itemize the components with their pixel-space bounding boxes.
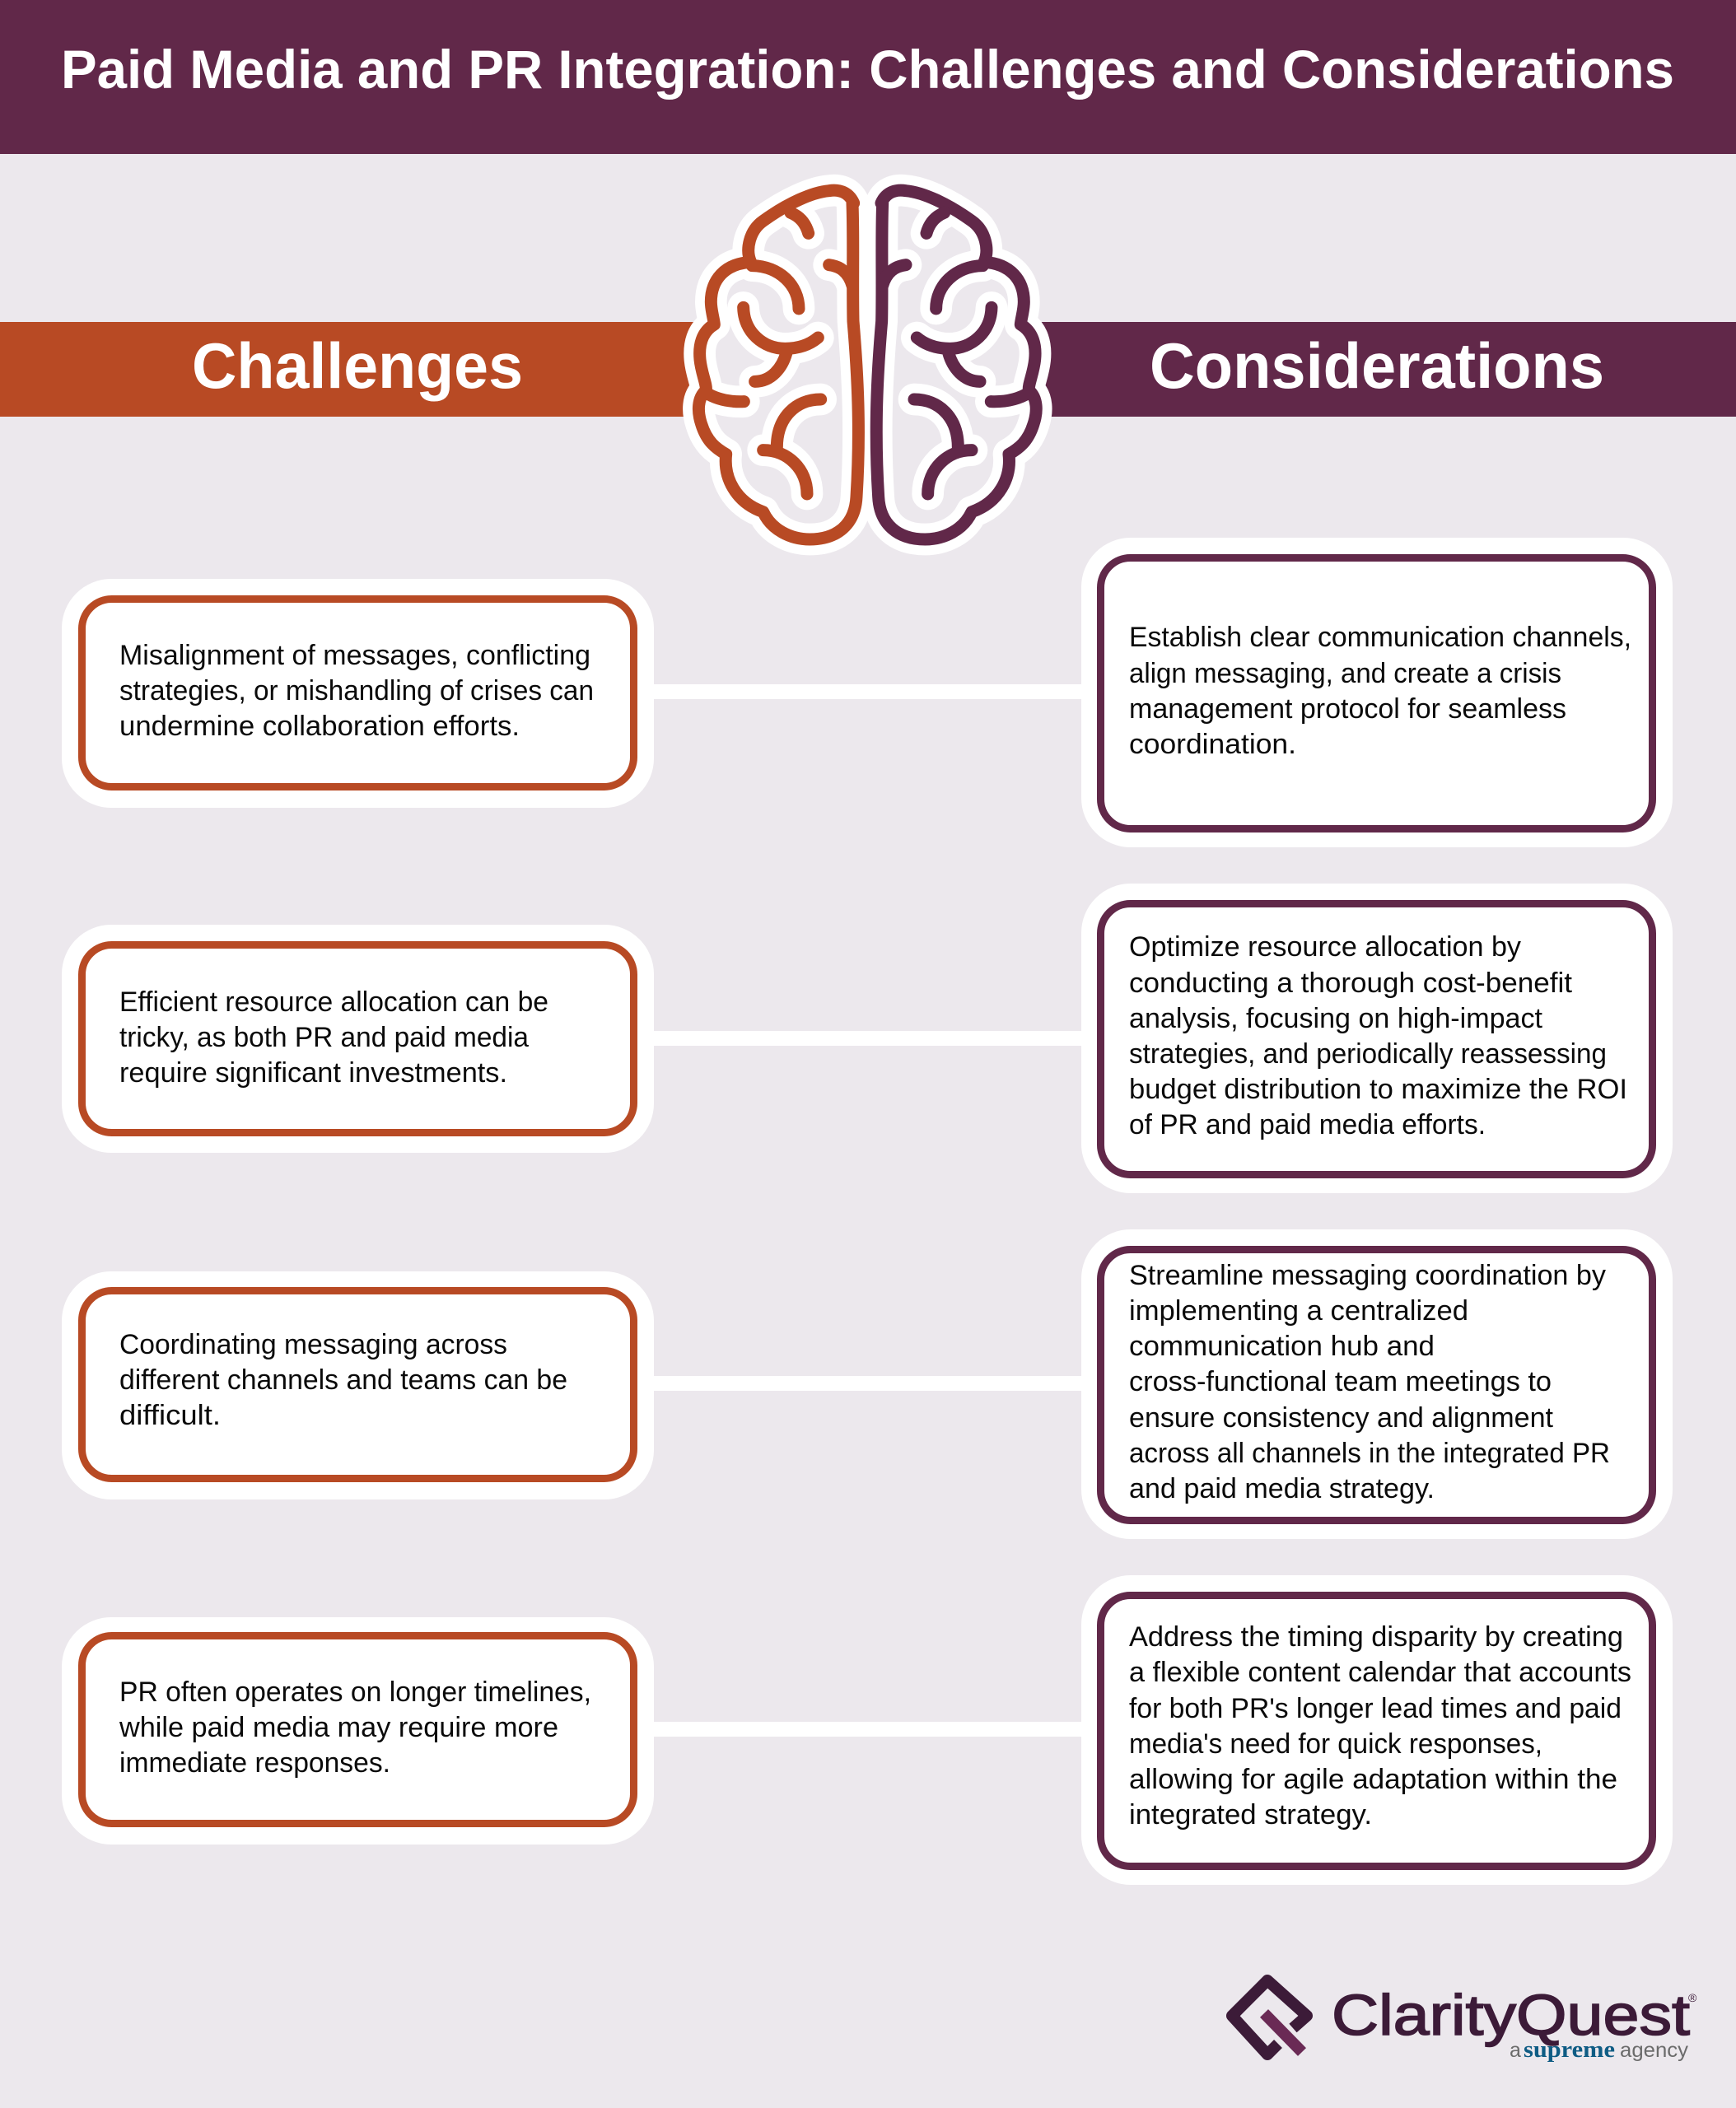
panel: consideration 1: [1081, 538, 1673, 847]
logo: ClarityQuest: [1232, 1980, 1697, 2063]
consideration 3 text: implementing a centralized: [1129, 1295, 1468, 1327]
challenge 4 text: PR often operates on longer timelines,: [119, 1677, 591, 1708]
icon: brain: [698, 190, 1036, 539]
consideration 1 text: [1129, 622, 1631, 760]
band: considerations: [1029, 322, 1736, 417]
challenge 3 text: difficult.: [119, 1400, 221, 1431]
consideration 2 text: Optimize resource allocation by: [1129, 931, 1521, 963]
brain left hemisphere: [698, 190, 858, 539]
challenge 2 text: require significant investments.: [119, 1057, 507, 1089]
connector 2: [651, 1031, 1085, 1046]
consideration 3 text: [1129, 1260, 1610, 1504]
panel: challenge 1: [62, 579, 654, 808]
challenge 2 text: Efficient resource allocation can be: [119, 986, 548, 1018]
challenge 4 text: immediate responses.: [119, 1747, 390, 1779]
panel: consideration 2: [1081, 884, 1673, 1193]
challenge 4 text: [119, 1677, 591, 1779]
logo tagline: agency: [1620, 2039, 1689, 2062]
connector 4: [651, 1722, 1085, 1737]
challenge 2 text: [119, 986, 548, 1089]
connector 3: [651, 1376, 1085, 1391]
logo tagline: supreme: [1524, 2037, 1615, 2063]
panel: challenge 3: [62, 1271, 654, 1499]
consideration 1 text: Establish clear communication channels,: [1129, 622, 1631, 653]
logo mark: [1232, 1980, 1307, 2054]
panel: consideration 4: [1081, 1575, 1673, 1885]
consideration 3 text: across all channels in the integrated PR: [1129, 1438, 1610, 1469]
consideration 2 text: analysis, focusing on high-impact: [1129, 1003, 1543, 1034]
challenge 3 text: Coordinating messaging across: [119, 1329, 507, 1360]
consideration 4 text: a flexible content calendar that accounts: [1129, 1657, 1631, 1688]
logo wordmark: ClarityQuest: [1332, 1983, 1690, 2047]
logo tagline: [1510, 2037, 1689, 2063]
challenge 1 text: undermine collaboration efforts.: [119, 711, 520, 742]
challenge 3 text: different channels and teams can be: [119, 1364, 567, 1396]
band: challenges: [0, 322, 708, 417]
consideration 2 text: strategies, and periodically reassessing: [1129, 1038, 1607, 1070]
consideration 1 text: align messaging, and create a crisis: [1129, 658, 1561, 689]
challenge 3 text: [119, 1329, 567, 1431]
challenge 1 text: [119, 640, 594, 742]
header banner: [0, 0, 1736, 154]
heading: considerations: Considerations: [1150, 329, 1604, 402]
consideration 3 text: communication hub and: [1129, 1331, 1435, 1362]
consideration 1 text: management protocol for seamless: [1129, 693, 1566, 725]
title: Paid Media and PR Integration: Challenges and Considerations: [61, 39, 1674, 100]
consideration 2 text: budget distribution to maximize the ROI: [1129, 1074, 1627, 1105]
panel: challenge 4: [62, 1617, 654, 1844]
consideration 4 text: media's need for quick responses,: [1129, 1728, 1542, 1760]
panel: consideration 3: [1081, 1229, 1673, 1539]
challenge 1 text: Misalignment of messages, conflicting: [119, 640, 590, 671]
challenge 1 text: strategies, or mishandling of crises can: [119, 675, 594, 707]
consideration 2 text: [1129, 931, 1627, 1140]
consideration 4 text: Address the timing disparity by creating: [1129, 1621, 1623, 1653]
logo tagline: a: [1510, 2039, 1521, 2062]
brain right hemisphere: [876, 190, 1036, 539]
consideration 3 text: cross-functional team meetings to: [1129, 1366, 1552, 1397]
challenge 2 text: tricky, as both PR and paid media: [119, 1022, 529, 1053]
consideration 4 text: for both PR's longer lead times and paid: [1129, 1693, 1622, 1724]
consideration 4 text: integrated strategy.: [1129, 1799, 1372, 1831]
logo registered mark: ®: [1688, 1991, 1697, 2004]
brain halo and fill: [698, 190, 1036, 539]
consideration 3 text: and paid media strategy.: [1129, 1473, 1435, 1504]
consideration 3 text: ensure consistency and alignment: [1129, 1402, 1554, 1434]
consideration 2 text: of PR and paid media efforts.: [1129, 1109, 1486, 1140]
panel: challenge 2: [62, 925, 654, 1153]
consideration 2 text: conducting a thorough cost-benefit: [1129, 968, 1573, 999]
consideration 4 text: [1129, 1621, 1631, 1831]
challenge 4 text: while paid media may require more: [119, 1712, 558, 1743]
consideration 4 text: allowing for agile adaptation within the: [1129, 1764, 1617, 1795]
heading: challenges: Challenges: [192, 329, 523, 402]
consideration 1 text: coordination.: [1129, 729, 1296, 760]
connector 1: [651, 684, 1085, 699]
consideration 3 text: Streamline messaging coordination by: [1129, 1260, 1606, 1291]
